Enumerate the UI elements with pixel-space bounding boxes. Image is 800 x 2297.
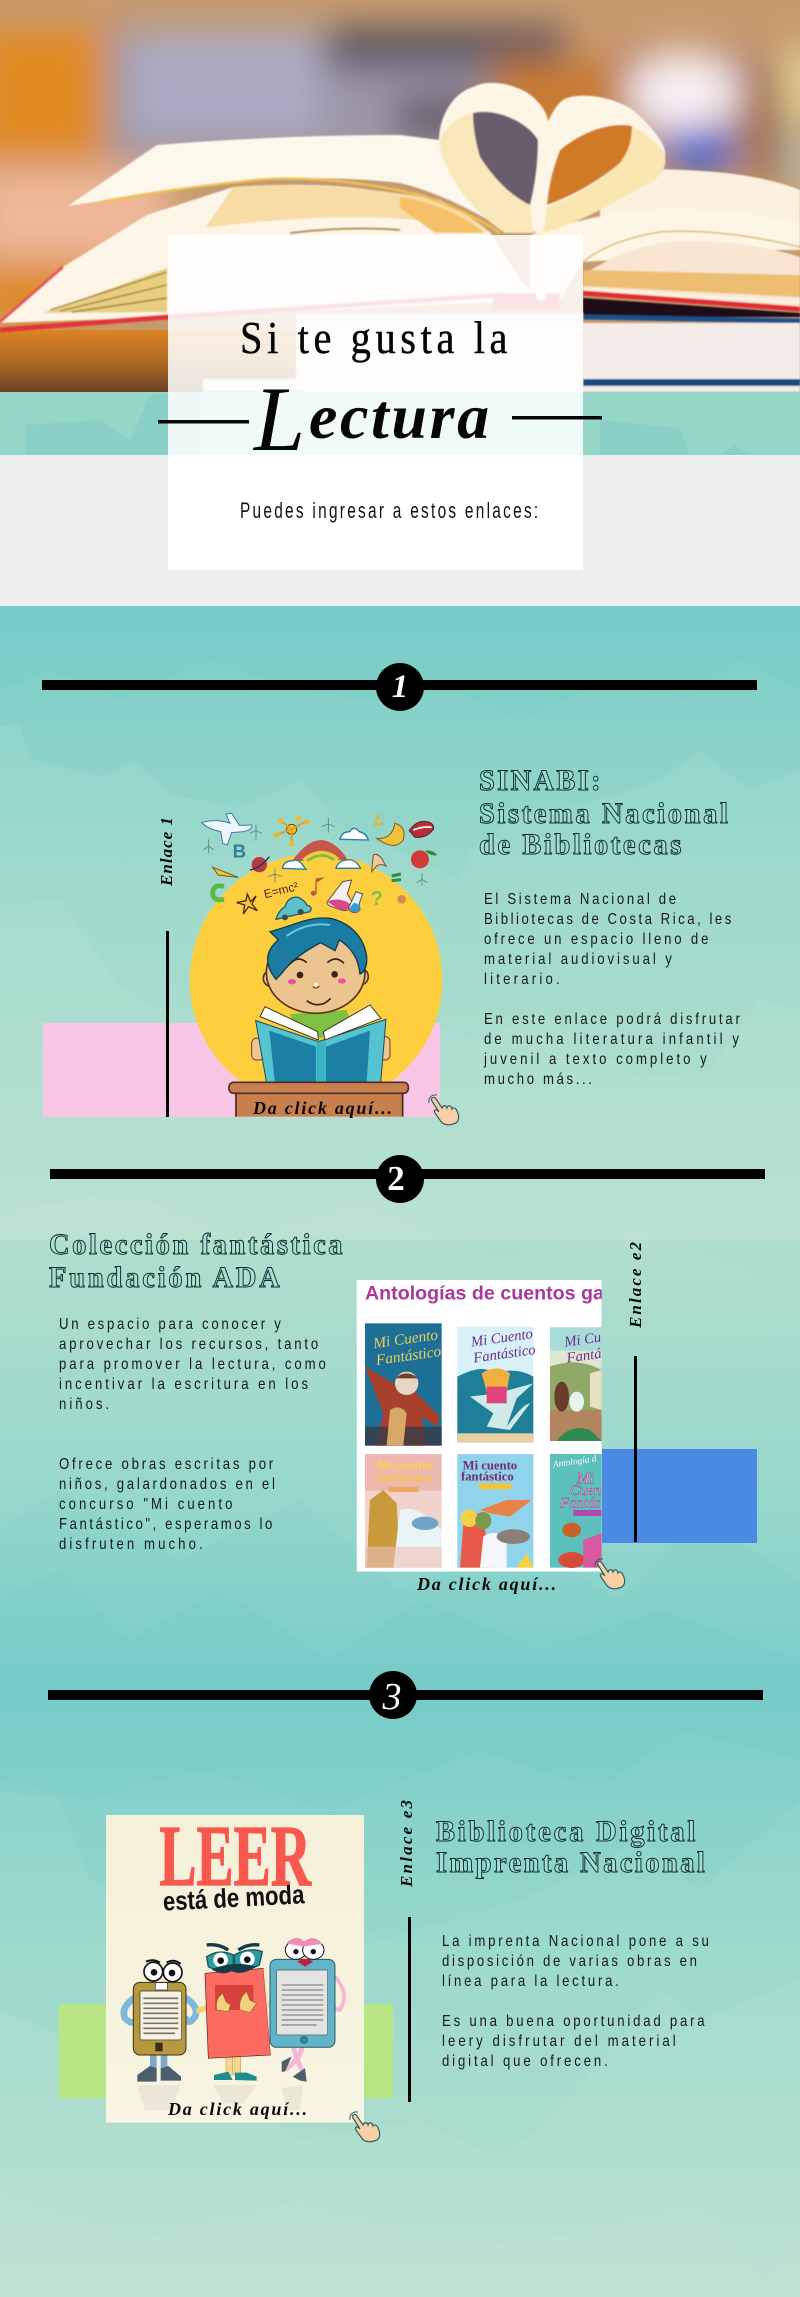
cover 3: Fantás bbox=[565, 1345, 608, 1367]
vertical rule bbox=[634, 1356, 637, 1542]
cover 1: Mi Cuento bbox=[371, 1326, 439, 1352]
section divider 3: 3 bbox=[382, 1676, 402, 1718]
text block: digital library description: Es una buena oportunidad para bbox=[442, 2013, 705, 2030]
cover 6: Cuent bbox=[570, 1483, 606, 1499]
vertical rule bbox=[408, 1917, 411, 2102]
icon: pointing hand bbox=[595, 1559, 625, 1589]
cover 1 bbox=[365, 1323, 442, 1446]
title panel bbox=[158, 235, 602, 570]
text block: collection description: incentivar la escritura en los bbox=[59, 1376, 308, 1393]
poster: LEER está de moda bbox=[106, 1807, 364, 2123]
text block: collection description: disfruten mucho. bbox=[59, 1536, 203, 1553]
doodles above head: ? bbox=[371, 888, 383, 910]
cover 2: Mi Cuento bbox=[469, 1326, 534, 1351]
doodles above head bbox=[202, 813, 437, 920]
cover 5 bbox=[457, 1454, 533, 1568]
heading: Biblioteca Digital: Biblioteca Digital bbox=[436, 1815, 695, 1848]
text block: collection description: concurso "Mi cuento bbox=[59, 1496, 232, 1513]
icon: pointing hand bbox=[350, 2112, 380, 2142]
title word: Lectura: L bbox=[252, 368, 305, 470]
title line: Si te gusta la: Si te gusta la bbox=[240, 313, 508, 364]
text block: collection description: Fantástico", esperamos lo bbox=[59, 1516, 272, 1533]
text block: SINABI description: ofrece un espacio lleno de bbox=[484, 931, 708, 948]
character: e-reader bbox=[124, 1960, 196, 2082]
click label on desk: Da click aquí... bbox=[252, 1098, 392, 1118]
text block: digital library description: línea para la lectura. bbox=[442, 1973, 619, 1990]
text block: collection description bbox=[59, 1316, 326, 1553]
text block: digital library description bbox=[442, 1933, 709, 2070]
cover 5: fantástico bbox=[461, 1470, 514, 1484]
vertical rule bbox=[166, 931, 169, 1117]
doodles above head: E=mc² bbox=[262, 879, 300, 901]
cover 1: Fantástico bbox=[374, 1343, 442, 1369]
green accent block bbox=[59, 2004, 393, 2098]
heading: Colección fantástica: Colección fantástica bbox=[49, 1228, 343, 1261]
floor reflections bbox=[137, 2085, 303, 2110]
section divider 2: 2 bbox=[387, 1159, 405, 1198]
vertical label: Enlace e3: Enlace e3 bbox=[397, 1800, 416, 1888]
screenshot: book covers bbox=[357, 1280, 616, 1572]
vertical label: Enlace 1: Enlace 1 bbox=[157, 817, 176, 887]
section 3: Biblioteca Digital bbox=[59, 1800, 709, 2142]
pink accent block bbox=[43, 1023, 440, 1117]
text block: SINABI description: juvenil a texto completo y bbox=[483, 1051, 707, 1068]
section divider 1 bbox=[42, 663, 757, 711]
cover 3: Mi Cuen bbox=[562, 1328, 616, 1351]
text block: SINABI description: literario. bbox=[484, 971, 560, 988]
doodles above head: B bbox=[233, 841, 246, 862]
click label under covers: Da click aquí... bbox=[416, 1574, 556, 1594]
blue accent block bbox=[602, 1449, 757, 1543]
text block: SINABI description: material audiovisual y bbox=[484, 951, 673, 968]
screenshot: book covers: Antologías de cuentos gar bbox=[365, 1283, 612, 1304]
text block: collection description: Ofrece obras escritas por bbox=[59, 1456, 273, 1473]
right rule of title bbox=[512, 416, 602, 420]
cover 4 bbox=[365, 1454, 442, 1568]
text block: digital library description: La imprenta Nacional pone a su bbox=[442, 1933, 709, 1950]
cover 4: fantástico bbox=[376, 1471, 433, 1485]
boy: book, face and hair bbox=[252, 918, 390, 1083]
poster: LEER está de moda: LEER bbox=[159, 1807, 312, 1904]
character: red book bbox=[197, 1945, 273, 2081]
text block: SINABI description: de mucha literatura infantil y bbox=[484, 1031, 740, 1048]
cover 6: Mi bbox=[576, 1470, 594, 1487]
cover 2 bbox=[457, 1326, 537, 1442]
text block: digital library description: digital que ofrecen. bbox=[442, 2053, 608, 2070]
text block: SINABI description: En este enlace podrá disfrutar bbox=[484, 1011, 740, 1028]
section divider 1: 1 bbox=[392, 669, 408, 705]
text block: digital library description: disposición de varias obras en bbox=[442, 1953, 697, 1970]
text block: SINABI description bbox=[483, 891, 740, 1088]
heading: Colección fantástica: Fundación ADA bbox=[49, 1261, 280, 1294]
character: tablet bbox=[270, 1938, 344, 2082]
cover 2: Fantástico bbox=[471, 1342, 537, 1367]
cover 3 bbox=[550, 1327, 616, 1441]
cover 5: Mi cuento bbox=[463, 1458, 517, 1472]
icon: pointing hand bbox=[429, 1095, 459, 1125]
text block: collection description: niños, galardonados en el bbox=[59, 1476, 275, 1493]
heading: Biblioteca Digital bbox=[436, 1815, 705, 1879]
subtitle: Puedes ingresar a estos enlaces: bbox=[240, 499, 538, 524]
desk bbox=[229, 1082, 408, 1118]
heading: Colección fantástica bbox=[49, 1228, 343, 1294]
illustration: boy reading bbox=[190, 813, 442, 1118]
header band: grey strip bbox=[0, 455, 800, 606]
poster: LEER está de moda: está de moda bbox=[162, 1879, 305, 1917]
text block: collection description: aprovechar los recursos, tanto bbox=[59, 1336, 318, 1353]
text block: SINABI description: Bibliotecas de Costa Rica, les bbox=[484, 911, 731, 928]
cover 6 bbox=[550, 1454, 606, 1568]
vertical label: Enlace e2: Enlace e2 bbox=[626, 1242, 645, 1329]
header band: teal strip bbox=[0, 392, 800, 455]
text block: collection description: Un espacio para conocer y bbox=[59, 1316, 282, 1333]
heading: SINABI: de Bibliotecas bbox=[479, 828, 681, 861]
section divider 2 bbox=[50, 1155, 765, 1203]
section divider 3 bbox=[48, 1671, 763, 1719]
title word: Lectura: ectura bbox=[309, 381, 492, 452]
text block: collection description: para promover la lectura, como bbox=[59, 1356, 326, 1373]
text block: SINABI description: mucho más... bbox=[484, 1071, 592, 1088]
heading: SINABI: Sistema Nacional bbox=[479, 797, 728, 830]
section 2: Colección fantástica bbox=[49, 1228, 757, 1594]
heading: SINABI: SINABI: bbox=[479, 764, 601, 797]
text block: collection description: niños. bbox=[59, 1396, 109, 1413]
cover 6: Fantás bbox=[559, 1495, 601, 1511]
cover 6: Antología d bbox=[551, 1454, 597, 1470]
cover 4: Mi cuento bbox=[377, 1458, 433, 1472]
heading: SINABI bbox=[479, 764, 728, 861]
text block: digital library description: leery disfrutar del material bbox=[442, 2033, 676, 2050]
click label on poster: Da click aquí... bbox=[167, 2099, 307, 2119]
text block: SINABI description: El Sistema Nacional de bbox=[484, 891, 676, 908]
heading: Biblioteca Digital: Imprenta Nacional bbox=[436, 1846, 705, 1879]
section 1: SINABI bbox=[43, 764, 740, 1125]
left rule of title bbox=[158, 420, 249, 424]
hero photo: open book with heart pages bbox=[0, 0, 800, 392]
